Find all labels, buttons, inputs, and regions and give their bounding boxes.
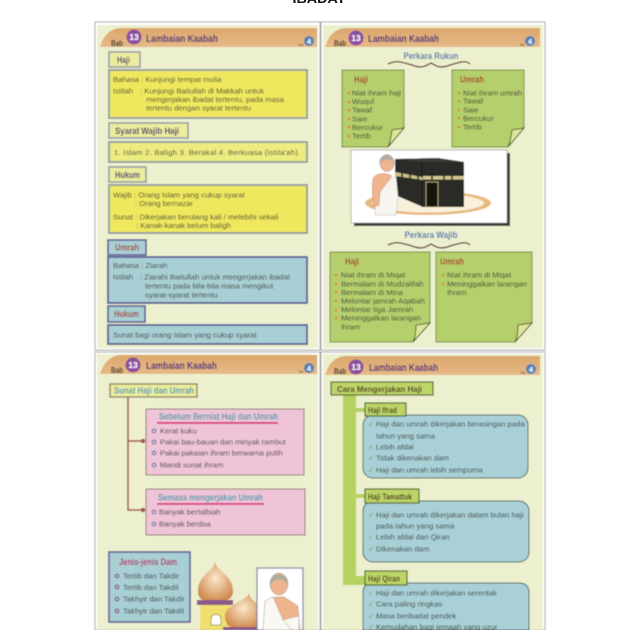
box: Syarat Wajib Haji: [109, 142, 307, 162]
box: Sebelum Berniat Haji dan Umrah: Pakai bau-bauan dan minyak rambut: [160, 438, 287, 446]
heading: Haji: [109, 52, 140, 67]
box: Hukum Haji: [109, 185, 307, 233]
box: Hukum Umrah: Sunat bagi orang Islam yang cukup syarat: [113, 330, 257, 340]
box: Jenis-jenis Dam: [109, 552, 190, 622]
box: Haji Qiran: Masa beribadat pendek: [376, 612, 457, 620]
illustration: mosque domes: [197, 561, 262, 630]
box: Umrah definition: tertentu pada bila-bila masa mengikut: [145, 282, 274, 290]
page header: 4: [529, 365, 534, 374]
note: Umrah rukun: Tertib: [463, 122, 482, 132]
box: Hukum Haji: Wajib : Orang Islam yang cukup syarat: [113, 190, 246, 200]
heading: Umrah: [108, 240, 146, 255]
note: Umrah rukun: Niat ihram umrah: [463, 88, 522, 98]
box: Sebelum Berniat Haji dan Umrah: Mandi sunat ihram: [160, 460, 223, 470]
note: Umrah wajib: [436, 252, 532, 342]
page header: hs: [521, 370, 525, 375]
note: Haji rukun: Niat ihram haji: [352, 88, 401, 98]
box: Haji Tamattuk: pada tahun yang sama: [376, 522, 455, 530]
box: Semasa mengerjakan Umrah: Banyak berdoa: [159, 520, 211, 528]
heading: Syarat Wajib Haji: [109, 123, 188, 138]
page header: 4: [307, 364, 312, 373]
page header: 13: [351, 33, 361, 43]
page header: 4: [528, 37, 533, 46]
panel: Sunat Haji dan Umrah: [95, 352, 320, 630]
note: Umrah wajib: Niat ihram di Miqat: [447, 270, 512, 280]
box: Hukum Haji: Sunat : Dikerjakan berulang kali / melebihi sekali: [113, 212, 279, 222]
page header: 13: [351, 362, 361, 372]
page header: [325, 356, 540, 376]
box: Haji Tamattuk: Lebih afdal dari Qiran: [376, 532, 450, 542]
note: Haji rukun: [342, 70, 404, 147]
box: Haji Tamattuk: ✓: [368, 512, 374, 520]
box: Haji Tamattuk: ✓: [368, 534, 374, 542]
page header: [100, 28, 317, 48]
note: Umrah rukun: [452, 70, 524, 147]
panel: Haji and Umrah definitions: [95, 22, 320, 350]
heading: Perkara Wajib: Perkara Wajib: [404, 230, 458, 241]
note: Haji wajib: Niat ihram di Miqat: [341, 270, 406, 280]
page header: Lambaian Kaabah: [146, 361, 217, 372]
box: Haji Tamattuk: [363, 489, 529, 562]
box: Haji Ifrad: tahun yang sama: [376, 432, 436, 440]
note: Haji wajib: Haji: [345, 256, 359, 266]
heading: Perkara Rukun: Perkara Rukun: [404, 51, 459, 62]
page header: [325, 28, 540, 48]
note: Umrah wajib: Meninggalkan larangan: [447, 280, 527, 288]
box: Haji definition: tertentu dengan syarat tertentu: [146, 104, 251, 112]
note: Haji wajib: Melontar tiga Jamrah: [341, 305, 413, 314]
panel: Perkara Rukun and Wajib: [321, 22, 545, 350]
page header: hs: [520, 42, 524, 47]
heading: Hukum Umrah: Hukum: [114, 309, 139, 319]
note: Umrah rukun: Saie: [463, 106, 478, 114]
note: Haji rukun: Tawaf: [352, 106, 373, 114]
heading: Haji: Haji: [117, 55, 130, 65]
box: Syarat Wajib Haji: 1. Islam 2. Baligh 3. Berakal 4. Berkuasa (istita'ah): [114, 148, 298, 157]
box: Haji Qiran: Cara paling ringkas: [376, 600, 442, 608]
box: Haji definition: [109, 70, 307, 118]
heading: Hukum: Hukum: [115, 170, 140, 180]
page header: Lambaian Kaabah: [369, 363, 438, 374]
box: Jenis-jenis Dam: Takhyir dan Takdil: [123, 606, 184, 616]
connector bar: [343, 395, 366, 585]
box: Hukum Haji: : Kanak-kanak belum baligh: [136, 221, 231, 230]
note: Haji wajib: Melontar jamrah Aqabah: [341, 296, 425, 306]
box: Haji Ifrad: [363, 403, 528, 478]
box: Haji Qiran: ✓: [368, 602, 374, 608]
note: Haji wajib: [330, 252, 430, 342]
note: Umrah wajib: Umrah: [440, 256, 464, 266]
note: Haji rukun: Wuquf: [352, 97, 375, 106]
squiggle divider: Wajib: [388, 243, 470, 248]
box: Jenis-jenis Dam: Tertib dan Takdir: [123, 572, 180, 580]
box: Semasa mengerjakan Umrah: Banyak bertalbiah: [159, 508, 221, 516]
page header: Bab: [334, 367, 346, 376]
squiggle divider: Rukun: [388, 62, 470, 67]
page header: Bab: [111, 366, 123, 375]
box: Haji definition: : Kunjungi Baitullah di Makkah untuk: [140, 86, 264, 96]
page header: 13: [128, 360, 138, 370]
box: Sebelum Berniat Haji dan Umrah: Pakai pakaian ihram berwarna putih: [160, 448, 283, 458]
box: Haji Ifrad: ✓: [368, 422, 374, 428]
box: Jenis-jenis Dam: Jenis-jenis Dam: [119, 557, 177, 567]
box: Haji Qiran: Haji dan umrah dikerjakan serentak: [376, 588, 497, 598]
box: Umrah definition: Bahasa : Ziarah: [113, 261, 167, 270]
page header: 4: [307, 37, 312, 46]
note: Haji wajib: Bermalam di Mina: [341, 288, 404, 297]
heading: Cara Mengerjakan Haji: [331, 382, 433, 395]
box: Umrah definition: : Ziarahi Baitullah untuk mengerjakan ibadat: [140, 272, 291, 282]
box: Haji Qiran: ✓: [368, 614, 374, 620]
page header: 13: [129, 32, 139, 42]
note: Haji wajib: Bermalam di Mudzalifah: [341, 280, 423, 288]
heading: Sunat Haji dan Umrah: [110, 384, 197, 397]
box: Jenis-jenis Dam: Tertib dan Takdil: [123, 583, 179, 592]
box: Hukum Haji: : Orang bernazar: [135, 199, 194, 208]
box: Sebelum Berniat Haji dan Umrah: [146, 409, 304, 475]
box: Umrah definition: syarat-syarat tertentu: [145, 290, 218, 300]
note: Umrah rukun: Tawaf: [463, 96, 484, 106]
page header: Lambaian Kaabah: [368, 34, 439, 45]
box: Haji Ifrad: Lebih afdal: [376, 442, 414, 452]
box: Semasa mengerjakan Umrah: Semasa mengerjakan Umrah: [158, 492, 263, 502]
box: Haji Qiran: ✓: [368, 590, 374, 598]
note: Haji rukun: Saie: [352, 114, 367, 124]
page header: Lambaian Kaabah: [146, 34, 218, 45]
box: Umrah definition: Istilah: [113, 272, 133, 282]
box: Umrah definition: [108, 257, 307, 303]
connector tree: [128, 397, 144, 512]
box: Haji Ifrad: Tidak dikenakan dam: [376, 454, 449, 462]
box: Haji Tamattuk: Haji dan umrah dikerjakan dalam bulan haji: [376, 510, 524, 520]
box: Haji Tamattuk: Dikenakan dam: [376, 544, 429, 554]
box: Haji Ifrad: Haji dan umrah lebih sempurna: [376, 466, 484, 474]
box: Sebelum Berniat Haji dan Umrah: Sebelum Berniat Haji dan Umrah: [159, 412, 278, 422]
note: Umrah wajib: ihram: [447, 288, 466, 297]
box: Sebelum Berniat Haji dan Umrah: Kerat kuku: [160, 426, 197, 436]
note: Haji wajib: ihram: [341, 322, 360, 332]
box: Hukum Umrah: [108, 325, 307, 344]
heading: Umrah: Umrah: [115, 242, 139, 252]
heading: Sunat Haji dan Umrah: Sunat Haji dan Umrah: [114, 386, 194, 396]
heading: Cara Mengerjakan Haji: Cara Mengerjakan Haji: [337, 384, 422, 394]
heading: Hukum Umrah: [108, 306, 145, 322]
box: Haji definition: Bahasa : Kunjungi tempat mulia: [113, 75, 222, 84]
illustration: Kaabah and pilgrim: [351, 150, 510, 226]
note: Haji wajib: Meninggalkan larangan: [341, 314, 421, 322]
box: Haji definition: mengerjakan ibadat tertentu, pada masa: [146, 95, 285, 104]
box: Jenis-jenis Dam: Takhyir dan Takdir: [123, 594, 185, 604]
box: Haji Qiran: Haji Qiran: [368, 574, 400, 584]
box: Haji definition: Istilah: [113, 86, 133, 96]
page header: [100, 355, 317, 375]
note: Umrah rukun: Umrah: [460, 74, 484, 84]
note: Haji rukun: Haji: [354, 74, 368, 84]
heading: Hukum: [109, 167, 146, 182]
page header: hs: [299, 42, 303, 47]
box: Haji Ifrad: Haji dan umrah dikerjakan berasingan pada: [376, 420, 525, 428]
box: Semasa mengerjakan Umrah: [146, 489, 305, 535]
box: Haji Tamattuk: Haji Tamattuk: [368, 492, 412, 502]
box: Haji Ifrad: ✓: [368, 456, 374, 462]
panel: Cara Mengerjakan Haji: [321, 352, 545, 630]
note: Haji rukun: Tertib: [352, 132, 371, 140]
illustration: pilgrim portrait: [257, 568, 303, 630]
heading: Syarat Wajib Haji: Syarat Wajib Haji: [115, 126, 179, 136]
note: Haji rukun: Bercukur: [352, 123, 383, 132]
box: Haji Ifrad: Haji Ifrad: [368, 406, 397, 415]
page header: Bab: [111, 39, 123, 48]
note: Umrah rukun: Bercukur: [463, 114, 494, 123]
box: Haji Ifrad: ✓: [368, 468, 374, 474]
box: Haji Qiran: [363, 571, 529, 630]
box: Haji Ifrad: ✓: [368, 444, 374, 452]
page header: hs: [299, 369, 303, 374]
box: Haji Tamattuk: ✓: [368, 546, 374, 554]
page header: Bab: [334, 39, 346, 48]
